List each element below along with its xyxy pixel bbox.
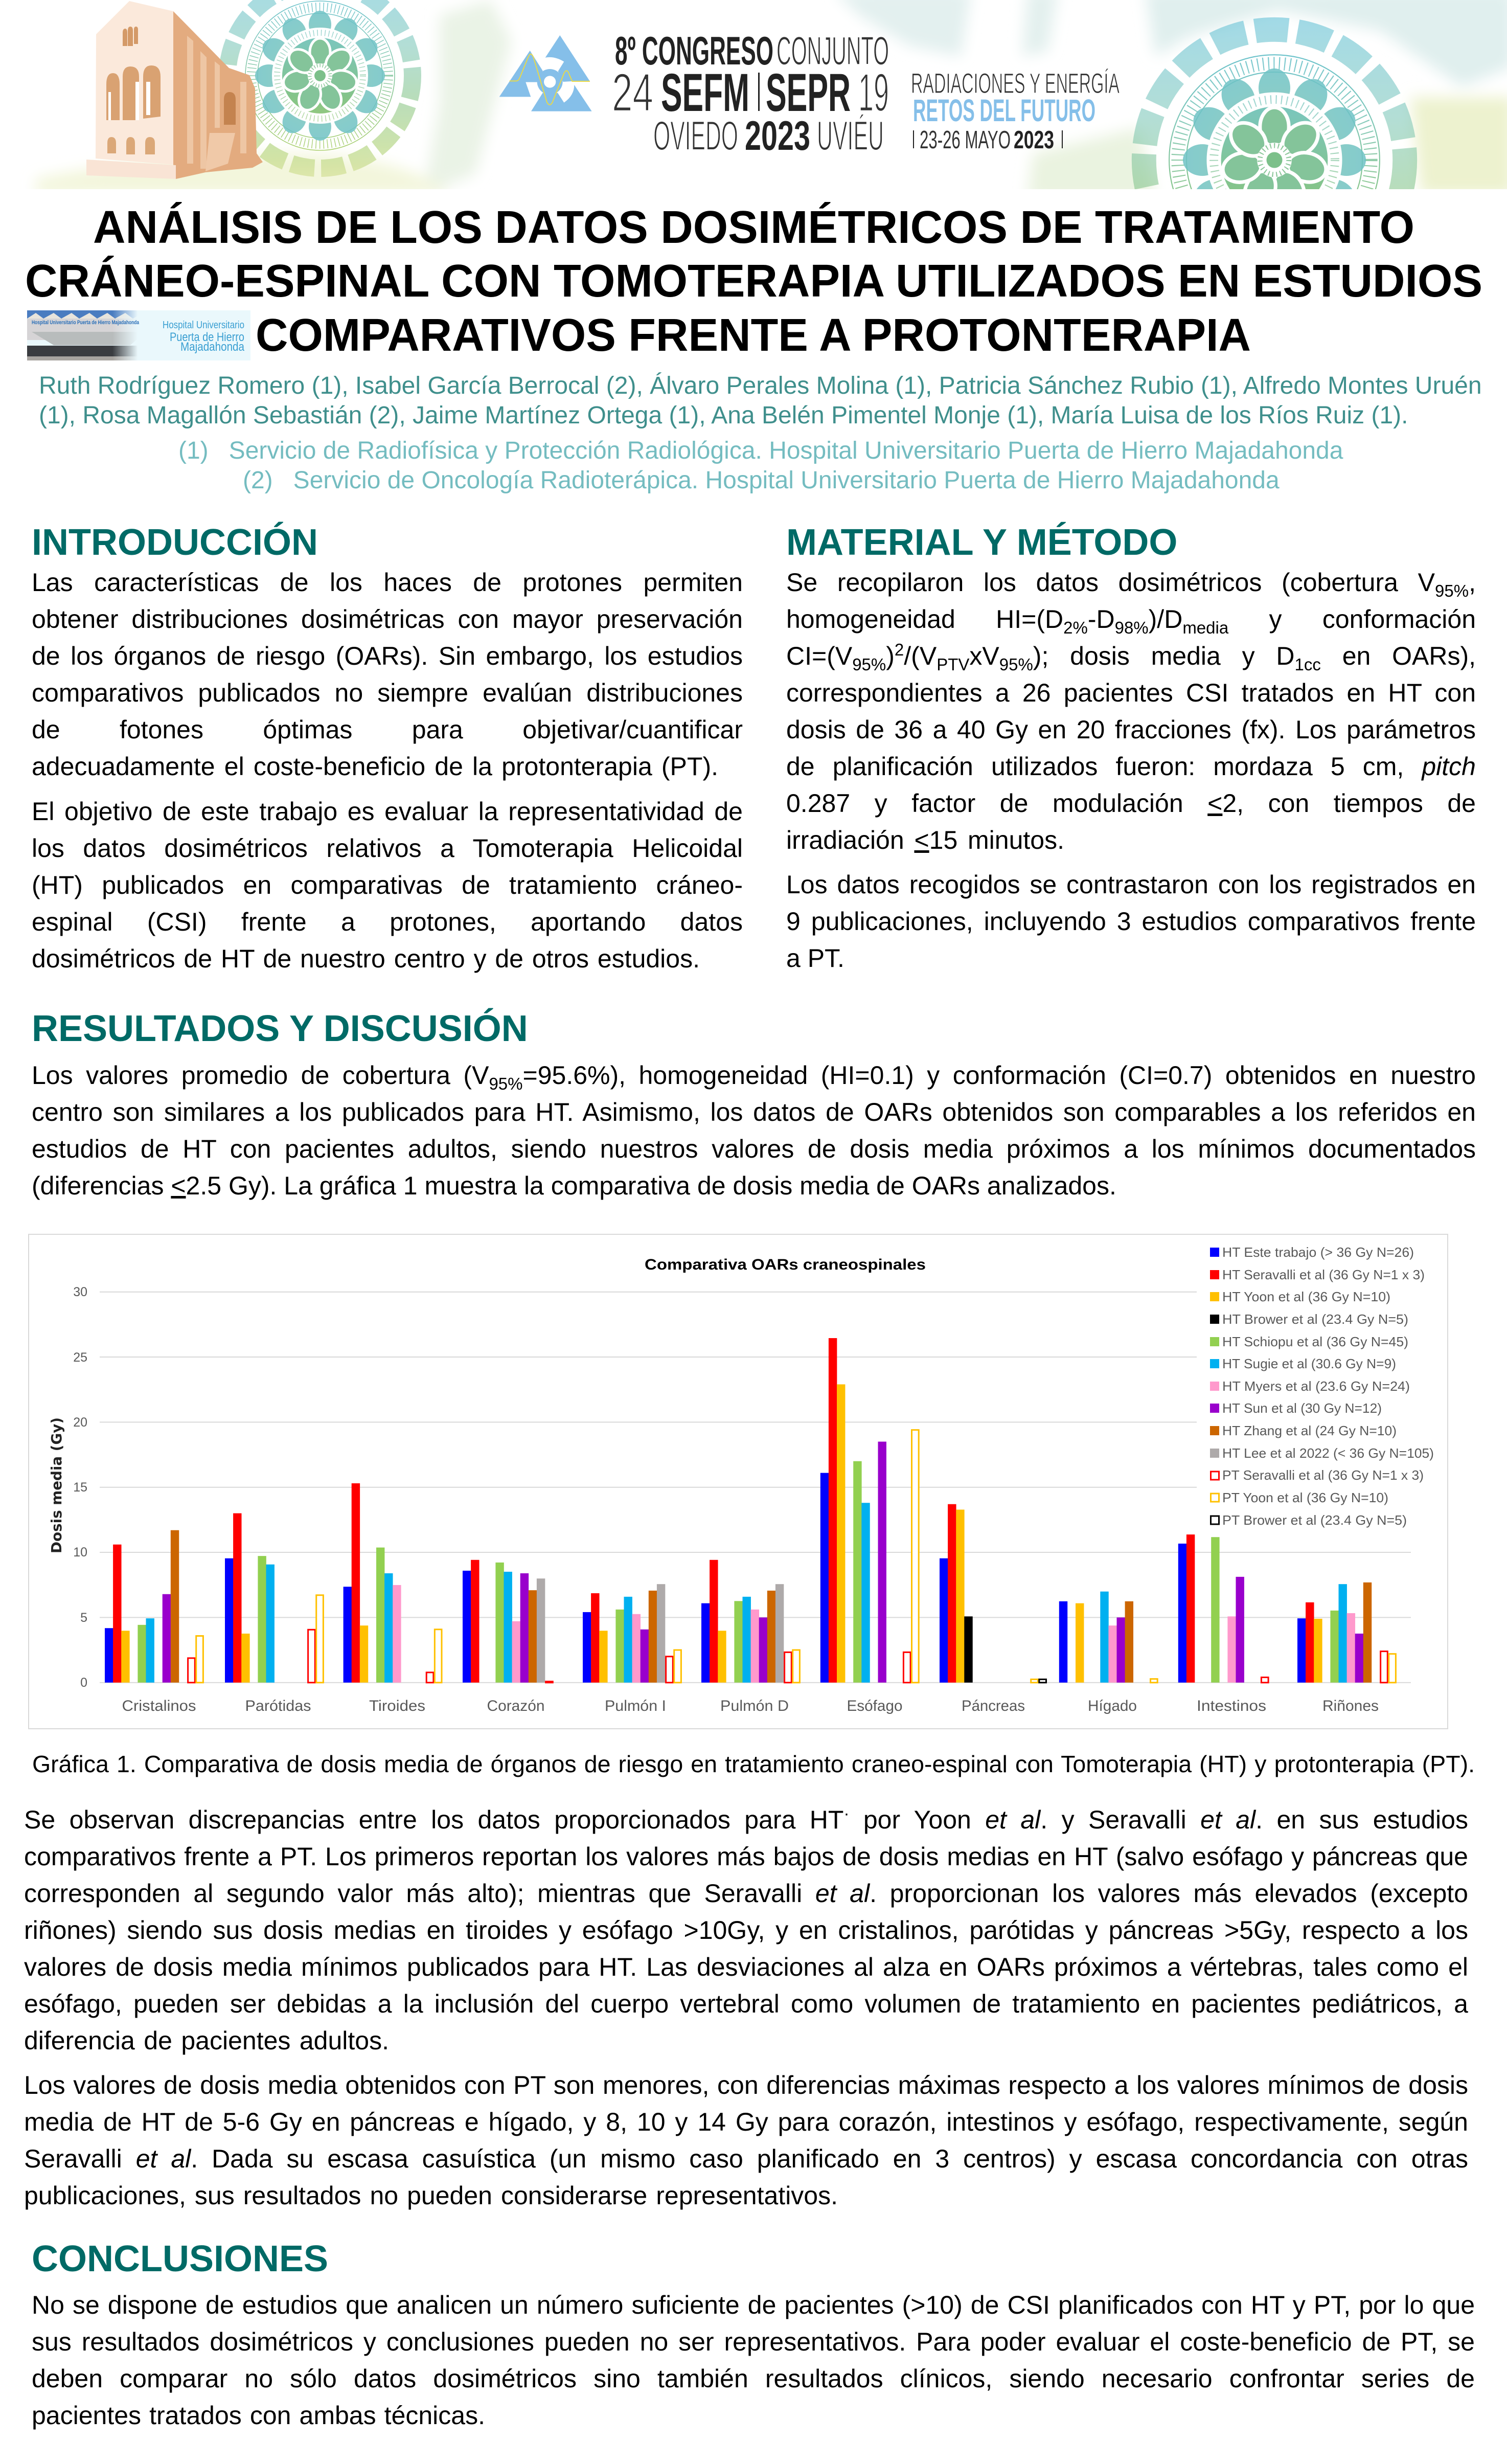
rosette left xyxy=(227,0,413,168)
legend: PT Seravalli et al (36 Gy N=1 x 3) xyxy=(1222,1467,1424,1483)
bars: Pulmón I xyxy=(583,1584,681,1683)
congress wordmark: UVIÉU xyxy=(817,113,884,159)
affiliations xyxy=(178,437,1343,494)
text: material y método paragraph 1: Se recopilaron los datos dosimétricos (cobertura V95%, xyxy=(786,568,1476,600)
legend: HT Schiopu et al (36 Gy N=45) xyxy=(1222,1334,1408,1349)
text: discusión paragraph 1: corresponden al segundo valor más alto); mientras que Seravalli et al. proporcionan los valores más elevados (excepto xyxy=(24,1879,1468,1908)
text: introducción paragraph 2: (HT) publicados en comparativas de tratamiento cráneo- xyxy=(32,871,743,899)
text: conclusiones: No se dispone de estudios que analicen un número suficiente de pacientes (>10) de CSI planificados con HT y PT, por lo que xyxy=(32,2291,1475,2319)
category labels: Pulmón I xyxy=(605,1698,666,1714)
y axis labels: 30 xyxy=(73,1285,87,1299)
congress wordmark: 19 xyxy=(858,63,889,123)
text: material y método paragraph 2: a PT. xyxy=(786,944,844,973)
legend: HT Myers et al (23.6 Gy N=24) xyxy=(1222,1378,1410,1394)
legend: HT Lee et al 2022 (< 36 Gy N=105) xyxy=(1222,1445,1434,1461)
text: material y método paragraph 1: dosis de 36 a 40 Gy en 20 fracciones (fx). Los parámetros xyxy=(786,715,1476,744)
bars: Intestinos xyxy=(1178,1534,1268,1683)
y axis labels: 5 xyxy=(80,1611,87,1625)
hospital logo xyxy=(27,310,250,360)
congress wordmark: 8º CONGRESO xyxy=(615,28,773,73)
text: introducción paragraph 1: obtener distribuciones dosimétricas con mayor preservación xyxy=(32,605,743,634)
category labels: Hígado xyxy=(1088,1698,1137,1714)
title: CRÁNEO-ESPINAL CON TOMOTERAPIA UTILIZADOS EN ESTUDIOS xyxy=(25,255,1482,307)
text: conclusiones xyxy=(32,2291,1475,2430)
legend: HT Sugie et al (30.6 Gy N=9) xyxy=(1222,1356,1396,1371)
category labels: Cristalinos xyxy=(122,1698,196,1714)
text: material y método paragraph 1: correspondientes a 26 pacientes CSI tratados en HT con xyxy=(786,679,1476,707)
text: material y método paragraph 1: irradiación <15 minutos. xyxy=(786,826,1064,854)
rosette right xyxy=(1144,30,1405,290)
text: discusión paragraph 1: Se observan discrepancias entre los datos proporcionados para HT· por Yoon et al. y Seravalli et al. en sus estudios xyxy=(24,1804,1468,1834)
bar chart: comparativa OARs xyxy=(28,1234,1448,1729)
header banner xyxy=(32,0,1507,189)
text: introducción paragraph 2 xyxy=(32,797,743,973)
authors: Ruth Rodríguez Romero (1), Isabel García Berrocal (2), Álvaro Perales Molina (1), Patricia Sánchez Rubio (1), Alfredo Montes Uruén xyxy=(39,372,1482,399)
illustration: church building xyxy=(86,1,263,179)
congress wordmark: RETOS DEL FUTURO xyxy=(913,93,1095,128)
affiliations: (1) Servicio de Radiofísica y Protección Radiológica. Hospital Universitario Puerta de Hierro Majadahonda xyxy=(178,437,1343,464)
congress wordmark: RADIACIONES Y ENERGÍA xyxy=(911,67,1120,99)
text: introducción paragraph 1: comparativos publicados no siempre evalúan distribuciones xyxy=(32,679,743,707)
text: resultados intro: Los valores promedio de cobertura (V95%=95.6%), homogeneidad (HI=0.1) y conformación (CI=0.7) obtenidos en nuestro xyxy=(32,1061,1476,1093)
y axis title: Dosis media (Gy) xyxy=(48,1417,65,1553)
legend: PT Yoon et al (36 Gy N=10) xyxy=(1222,1490,1388,1505)
legend: HT Sun et al (30 Gy N=12) xyxy=(1222,1400,1382,1416)
bars: Riñones xyxy=(1297,1583,1396,1683)
text: introducción paragraph 2: espinal (CSI) frente a protones, aportando datos xyxy=(32,908,743,936)
text: discusión paragraph 2: Seravalli et al. Dada su escasa casuística (un mismo caso planificado en 3 centros) y escasa concordancia con otras xyxy=(24,2144,1468,2173)
y axis labels: 15 xyxy=(73,1480,87,1495)
bars: Cristalinos xyxy=(105,1530,203,1683)
text: conclusiones: sus resultados dosimétricos y conclusiones pueden no ser representativos. Para poder evaluar el coste-beneficio de PT, se xyxy=(32,2327,1475,2356)
authors xyxy=(39,372,1482,429)
text: discusión paragraph 1 xyxy=(24,1804,1468,2055)
icon: congress logo triangles xyxy=(499,35,592,111)
category labels: Pulmón D xyxy=(720,1698,789,1714)
text: conclusiones: deben comparar no sólo datos dosimétricos sino también resultados clínicos, siendo necesario confrontar series de xyxy=(32,2364,1475,2393)
y axis labels xyxy=(73,1285,87,1690)
congress wordmark: OVIEDO xyxy=(653,113,738,159)
text: resultados intro: centro son similares a los publicados para HT. Asimismo, los datos de OARs obtenidos son comparables a los referidos en xyxy=(32,1098,1476,1126)
y axis labels: 10 xyxy=(73,1545,87,1559)
category labels xyxy=(122,1698,1379,1714)
congress wordmark: SEFM xyxy=(661,63,749,123)
text: material y método paragraph 1 xyxy=(786,568,1476,854)
text: material y método paragraph 1: CI=(V95%)2/(VPTVxV95%); dosis media y D1cc en OARs), xyxy=(786,640,1476,674)
text: introducción paragraph 2: El objetivo de este trabajo es evaluar la representatividad de xyxy=(32,797,743,826)
category labels: Intestinos xyxy=(1197,1698,1266,1714)
bars: Tiroides xyxy=(344,1483,442,1683)
text: discusión paragraph 1: diferencia de pacientes adultos. xyxy=(24,2026,389,2055)
text: discusión paragraph 2: publicaciones, sus resultados no pueden considerarse representativos. xyxy=(24,2181,838,2210)
title xyxy=(25,201,1482,358)
bars: Hígado xyxy=(1059,1592,1157,1683)
bars: Parótidas xyxy=(225,1513,323,1683)
congress wordmark: SEPR xyxy=(766,63,851,123)
congress wordmark: 24 xyxy=(612,63,653,123)
legend: HT Yoon et al (36 Gy N=10) xyxy=(1222,1289,1390,1304)
text: introducción paragraph 1: de fotones óptimas para objetivar/cuantificar xyxy=(32,715,743,744)
text: introducción paragraph 1: de los órganos de riesgo (OARs). Sin embargo, los estudios xyxy=(32,642,743,670)
text: material y método paragraph 1: homogeneidad HI=(D2%-D98%)/Dmedia y conformación xyxy=(786,605,1476,637)
y axis labels: 0 xyxy=(80,1676,87,1690)
chart title: Comparativa OARs craneospinales xyxy=(645,1256,926,1273)
hospital logo: Hospital Universitario Puerta de Hierro Majadahonda xyxy=(32,320,140,326)
legend xyxy=(1210,1245,1434,1528)
congress wordmark: 23-26 MAYO xyxy=(920,126,1011,154)
text: resultados intro: estudios de HT con pacientes adultos, siendo nuestros valores de dosis media próximos a los mínimos documentados xyxy=(32,1135,1476,1163)
text: introducción paragraph 1 xyxy=(32,568,743,781)
legend: HT Este trabajo (> 36 Gy N=26) xyxy=(1222,1245,1414,1260)
bars: Páncreas xyxy=(940,1504,1046,1683)
text: discusión paragraph 1: esófago, pueden ser debidas a la inclusión del cuerpo vertebral como volumen de tratamiento en pacientes pediátricos, a xyxy=(24,1990,1468,2018)
text: introducción paragraph 1: Las características de los haces de protones permiten xyxy=(32,568,743,597)
affiliations: (2) Servicio de Oncología Radioterápica. Hospital Universitario Puerta de Hierro Majadahonda xyxy=(243,467,1280,494)
legend: PT Brower et al (23.4 Gy N=5) xyxy=(1222,1512,1407,1528)
watercolor background xyxy=(36,0,1507,199)
category labels: Páncreas xyxy=(962,1698,1025,1714)
text: resultados intro xyxy=(32,1061,1476,1200)
bars: Pulmón D xyxy=(701,1560,800,1683)
text: material y método paragraph 1: de planificación utilizados fueron: mordaza 5 cm, pitch xyxy=(786,752,1476,781)
text: discusión paragraph 2: Los valores de dosis media obtenidos con PT son menores, con diferencias máximas respecto a los valores mínimos de dosis xyxy=(24,2071,1468,2099)
category labels: Corazón xyxy=(487,1698,545,1714)
heading: conclusiones: CONCLUSIONES xyxy=(32,2239,328,2279)
y axis labels: 25 xyxy=(73,1350,87,1365)
category labels: Riñones xyxy=(1322,1698,1379,1714)
text: resultados intro: (diferencias <2.5 Gy). La gráfica 1 muestra la comparativa de dosis media de OARs analizados. xyxy=(32,1171,1116,1200)
congress wordmark: 2023 xyxy=(1014,126,1054,154)
title: ANÁLISIS DE LOS DATOS DOSIMÉTRICOS DE TRATAMIENTO xyxy=(93,201,1414,253)
text: material y método paragraph 2 xyxy=(786,870,1476,973)
text: discusión paragraph 1: valores de dosis media mínimos publicados para HT. Las desviaciones al alza en OARs próximos a vértebras, tales como el xyxy=(24,1953,1468,1981)
congress wordmark: 2023 xyxy=(745,113,810,159)
text: discusión paragraph 2: media de HT de 5-6 Gy en páncreas e hígado, y 8, 10 y 14 Gy para corazón, intestinos y esófago, respectivamente, según xyxy=(24,2108,1468,2136)
legend: HT Brower et al (23.4 Gy N=5) xyxy=(1222,1312,1408,1327)
congress wordmark xyxy=(612,28,1120,159)
y axis labels: 20 xyxy=(73,1415,87,1430)
text: introducción paragraph 2: dosimétricos de HT de nuestro centro y de otros estudios. xyxy=(32,944,700,973)
heading: introducción: INTRODUCCIÓN xyxy=(32,522,318,563)
category labels: Esófago xyxy=(847,1698,903,1714)
text: discusión paragraph 1: comparativos frente a PT. Los primeros reportan los valores más bajos de dosis medias en HT (salvo esófago y páncreas que xyxy=(24,1842,1468,1871)
bars: Corazón xyxy=(463,1560,553,1683)
heading: material y método: MATERIAL Y MÉTODO xyxy=(786,522,1177,563)
text: material y método paragraph 1: 0.287 y factor de modulación <2, con tiempos de xyxy=(786,789,1476,818)
text: conclusiones: pacientes tratados con ambas técnicas. xyxy=(32,2401,485,2430)
text: introducción paragraph 2: los datos dosimétricos relativos a Tomoterapia Helicoidal xyxy=(32,834,743,863)
bars: Esófago xyxy=(820,1338,919,1683)
text: material y método paragraph 2: 9 publicaciones, incluyendo 3 estudios comparativos frente xyxy=(786,907,1476,936)
legend: HT Zhang et al (24 Gy N=10) xyxy=(1222,1423,1397,1438)
category labels: Tiroides xyxy=(369,1698,425,1714)
heading: resultados y discusión: RESULTADOS Y DISCUSIÓN xyxy=(32,1008,528,1049)
text: introducción paragraph 1: adecuadamente el coste-beneficio de la protonterapia (PT). xyxy=(32,752,718,781)
text: material y método paragraph 2: Los datos recogidos se contrastaron con los registrados en xyxy=(786,870,1476,899)
authors: (1), Rosa Magallón Sebastián (2), Jaime Martínez Ortega (1), Ana Belén Pimentel Monje (1), María Luisa de los Ríos Ruiz (1). xyxy=(39,402,1408,429)
legend: HT Seravalli et al (36 Gy N=1 x 3) xyxy=(1222,1267,1425,1282)
caption: gráfica 1: Gráfica 1. Comparativa de dosis media de órganos de riesgo en tratamiento craneo-espinal con Tomoterapia (HT) y protonterapia (PT). xyxy=(32,1751,1475,1777)
category labels: Parótidas xyxy=(245,1698,311,1714)
congress wordmark: CONJUNTO xyxy=(777,28,889,73)
text: discusión paragraph 2 xyxy=(24,2071,1468,2210)
text: discusión paragraph 1: riñones) siendo sus dosis medias en tiroides y esófago >10Gy, y en cristalinos, parótidas y páncreas >5Gy, respecto a los xyxy=(24,1916,1468,1945)
